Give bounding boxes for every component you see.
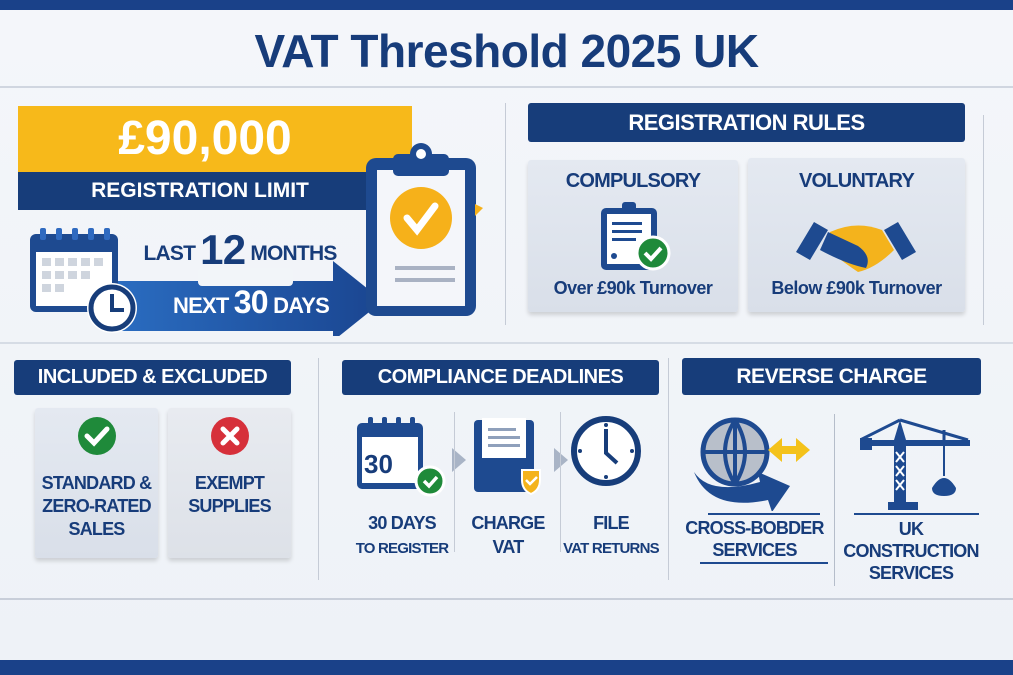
yellow amount banner: £90,000 <box>118 112 292 165</box>
icon: green check <box>78 417 116 455</box>
icon: calendar 30: 30 <box>364 449 393 479</box>
text: file vat returns: FILE <box>593 513 629 533</box>
header: reverse charge <box>682 358 981 395</box>
card: standard & zero-rated: ZERO-RATED <box>42 496 151 516</box>
header: reverse charge: REVERSE CHARGE <box>736 365 927 388</box>
text: uk construction services <box>843 519 979 583</box>
header: registration rules: REGISTRATION RULES <box>628 110 865 135</box>
card: standard & zero-rated: STANDARD & <box>42 473 151 493</box>
panel: included & excluded <box>14 360 292 562</box>
text: 30 days to register <box>356 513 449 557</box>
header: compliance deadlines <box>342 360 659 395</box>
registration limit label: REGISTRATION LIMIT <box>91 179 309 202</box>
arrow <box>554 448 568 472</box>
text: next 30 days: NEXT 30 DAYS <box>173 284 329 320</box>
icon: document check <box>601 202 670 270</box>
card: compulsory: COMPULSORY <box>566 170 700 192</box>
arrow band <box>118 261 368 336</box>
card: exempt supplies <box>168 408 291 558</box>
text: 30 days to register: TO REGISTER <box>356 540 448 557</box>
header: registration rules <box>528 103 965 142</box>
text: charge vat: CHARGE <box>471 513 545 533</box>
text: uk construction services: CONSTRUCTION <box>843 541 979 561</box>
header: compliance deadlines: COMPLIANCE DEADLINES <box>378 366 623 388</box>
card: voluntary: VOLUNTARY <box>799 170 914 192</box>
yellow amount banner <box>18 106 412 172</box>
text: cross-border services: SERVICES <box>712 540 797 560</box>
card: voluntary: Below £90k Turnover <box>771 278 942 298</box>
header: included & excluded <box>14 360 291 395</box>
card: compulsory <box>528 160 738 312</box>
text: file vat returns <box>563 513 660 557</box>
header: included & excluded: INCLUDED & EXCLUDED <box>38 366 267 388</box>
icon: red cross <box>211 417 249 455</box>
icon: clock <box>571 416 641 486</box>
icon: calendar 30 <box>357 417 446 496</box>
text: charge vat: VAT <box>493 537 523 557</box>
arrow <box>452 448 466 472</box>
text: 30 days to register: 30 DAYS <box>368 513 436 533</box>
icon: globe with arrows <box>694 418 810 511</box>
card: compulsory: Over £90k Turnover <box>554 278 712 298</box>
text: last 12 months: LAST 12 MONTHS <box>143 226 337 273</box>
title: VAT Threshold 2025 UK <box>254 25 759 77</box>
card: standard & zero-rated: SALES <box>68 519 124 539</box>
icon: handshake <box>796 222 916 272</box>
panel: registration rules <box>526 103 966 316</box>
panel: compliance deadlines <box>342 360 660 557</box>
text: uk construction services: UK <box>899 519 923 539</box>
icon: clipboard check <box>366 143 483 316</box>
icon: document with badge <box>474 418 541 495</box>
card: voluntary <box>748 158 965 312</box>
text: charge vat <box>471 513 545 557</box>
panel: registration limit <box>18 106 483 336</box>
card: standard & zero-rated <box>35 408 158 558</box>
icon: calendar with clock <box>30 228 137 333</box>
text: file vat returns: VAT RETURNS <box>563 540 659 557</box>
panel: reverse charge <box>682 358 981 586</box>
registration limit label <box>18 172 412 210</box>
card: exempt supplies: SUPPLIES <box>188 496 271 516</box>
text: cross-border services <box>685 518 824 560</box>
card: exempt supplies: EXEMPT <box>195 473 264 493</box>
text: uk construction services: SERVICES <box>869 563 953 583</box>
text: cross-border services: CROSS-BOBDER <box>685 518 824 538</box>
icon: construction crane <box>860 418 970 510</box>
